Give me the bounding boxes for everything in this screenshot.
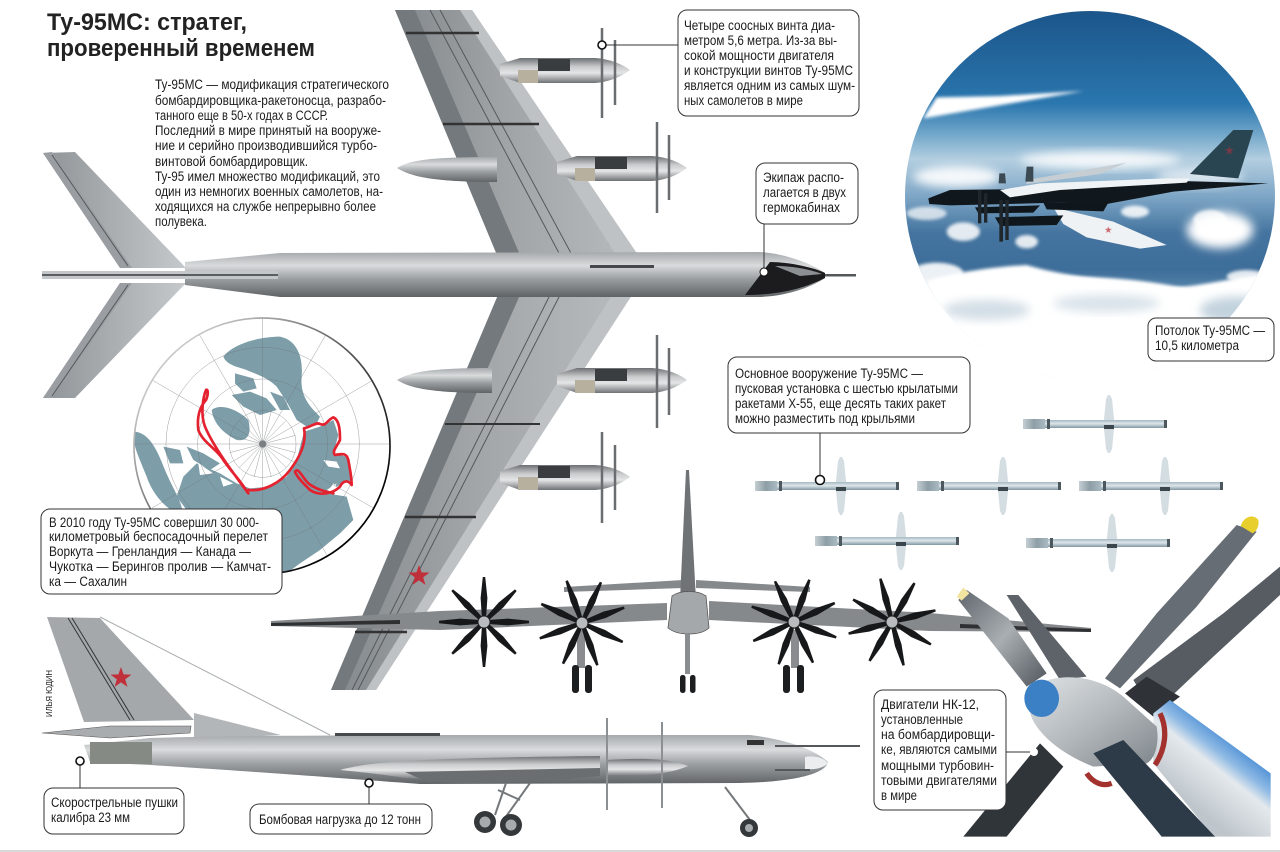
blue spinner cap	[1024, 680, 1059, 717]
callout: 2010 flight: ка — Сахалин	[49, 574, 127, 589]
callout: engines: Двигатели НК-12,	[881, 697, 979, 712]
antenna wire	[100, 617, 330, 735]
red flight route	[198, 390, 352, 494]
blade: upper right near	[1133, 567, 1280, 713]
callout: service ceiling: Потолок Ту-95МС —	[1155, 323, 1265, 338]
callout: 2010 flight: километровый беспосадочный перелет	[49, 529, 268, 544]
engine nacelles and propellers	[500, 28, 687, 523]
author credit: ИЛЬЯ ЮДИН	[44, 670, 54, 717]
photo: NK-12 engine and propeller	[957, 517, 1280, 837]
callout: engines: товыми двигателями	[881, 773, 997, 788]
callout: propellers: сокой мощности двигателя	[684, 48, 834, 63]
nacelle	[1153, 700, 1271, 837]
callout: armament: можно разместить под крыльями	[735, 411, 915, 426]
callout: engines: установленные	[881, 712, 963, 727]
front-view aircraft	[271, 470, 1091, 693]
blade: upper right far	[1105, 517, 1259, 688]
callout: engines: мощными турбовин-	[881, 758, 994, 773]
side-view aircraft	[42, 617, 860, 837]
aircraft silhouette	[928, 130, 1268, 249]
drop pods	[397, 157, 497, 393]
map pole	[259, 440, 266, 448]
intro text block: Последний в мире принятый на вооруже-	[155, 123, 381, 138]
callout: armament	[728, 357, 970, 484]
map seas	[198, 460, 340, 492]
map: polar flight route	[133, 316, 391, 577]
callout: armament: пусковая установка с шестью крылатыми	[735, 381, 958, 396]
callout: propellers: ных самолетов в мире	[684, 93, 803, 108]
blade: lower left	[963, 743, 1063, 837]
callout: engines: ке, являются самыми	[881, 742, 997, 757]
blade: upper left far	[1007, 595, 1087, 680]
callout: crew: лагается в двух	[763, 185, 846, 200]
icon: red star on wing	[409, 565, 429, 585]
callout: cannons	[44, 757, 184, 834]
propellers	[439, 564, 947, 681]
title	[47, 9, 315, 62]
intro text block	[155, 77, 389, 229]
callout: armament: Основное вооружение Ту-95МС —	[735, 366, 923, 381]
red ring	[1155, 713, 1165, 765]
spinner	[1030, 677, 1158, 767]
photo: Tu-95MS in flight	[905, 11, 1275, 374]
landing gear	[572, 630, 804, 693]
callout: propellers: является одним из самых шум-	[684, 78, 855, 93]
intro text block: один из немногих военных самолетов, на-	[155, 184, 383, 199]
callout: propellers: и конструкции винтов Ту-95МС	[684, 63, 853, 78]
blade root	[1125, 677, 1180, 717]
callout: propellers	[598, 10, 859, 116]
intro text block: ние и серийно производившийся турбо-	[155, 138, 377, 153]
title: проверенный временем	[47, 35, 315, 62]
clouds	[867, 91, 1280, 397]
intro text block: танного еще в 50-х годах в СССР.	[155, 108, 328, 123]
intro text block: Ту-95 имел множество модификаций, это	[155, 169, 380, 184]
callout: service ceiling: 10,5 километра	[1155, 338, 1239, 353]
fuselage	[42, 252, 856, 297]
intro text block: Ту-95МС — модификация стратегического	[155, 77, 389, 92]
callout: crew: гермокабинах	[763, 200, 840, 215]
callout: crew: Экипаж распо-	[763, 170, 844, 185]
callout: cannons: калибра 23 мм	[51, 810, 130, 825]
upper wing	[395, 10, 640, 258]
wings	[271, 601, 1091, 632]
callout: engines: в мире	[881, 788, 917, 803]
callout: cannons: Скорострельные пушки	[51, 795, 178, 810]
bottom band	[0, 850, 1280, 852]
callout: bomb load	[250, 779, 432, 834]
blade: lower right	[1093, 740, 1215, 837]
fuselage front	[668, 592, 709, 634]
callout: bomb load: Бомбовая нагрузка до 12 тонн	[259, 812, 421, 827]
callout: 2010 flight: В 2010 году Ту-95МС совершил 30 000-	[49, 515, 259, 530]
callout: engines: на бомбардировщи-	[881, 727, 995, 742]
callout: 2010 flight	[41, 509, 282, 594]
intro text block: ходящихся на службе непрерывно более	[155, 199, 376, 214]
missiles: Kh-55	[755, 395, 1223, 572]
callout: 2010 flight: Воркута — Гренландия — Канада —	[49, 544, 251, 559]
callout: propellers: Четыре соосных винта диа-	[684, 18, 835, 33]
tail fin	[42, 617, 281, 740]
callout: propellers: метром 5,6 метра. Из-за вы-	[684, 33, 837, 48]
map land masses	[133, 337, 353, 577]
fuselage side	[84, 735, 828, 784]
top-view aircraft plan	[42, 10, 856, 690]
callout: armament: ракетами Х-55, еще десять таких ракет	[735, 396, 946, 411]
map rim	[134, 318, 390, 574]
intro text block: винтовой бомбардировщик.	[155, 154, 308, 169]
map graticule	[135, 316, 391, 572]
callout: engines	[874, 690, 1038, 810]
landing gear side	[474, 783, 758, 837]
title: Ту-95МС: стратег,	[47, 9, 247, 36]
blade: upper left near	[957, 587, 1047, 687]
lower wing	[331, 295, 632, 690]
tail plane	[43, 152, 186, 398]
intro text block: полувека.	[155, 214, 207, 229]
stabiliser and fin	[564, 470, 810, 600]
callout: crew	[756, 163, 858, 276]
callout: 2010 flight: Чукотка — Берингов пролив — Камчат-	[49, 559, 271, 574]
callout: service ceiling	[1148, 318, 1274, 361]
nacelles side	[340, 718, 688, 810]
intro text block: бомбардировщика-ракетоносца, разрабо-	[155, 93, 386, 108]
